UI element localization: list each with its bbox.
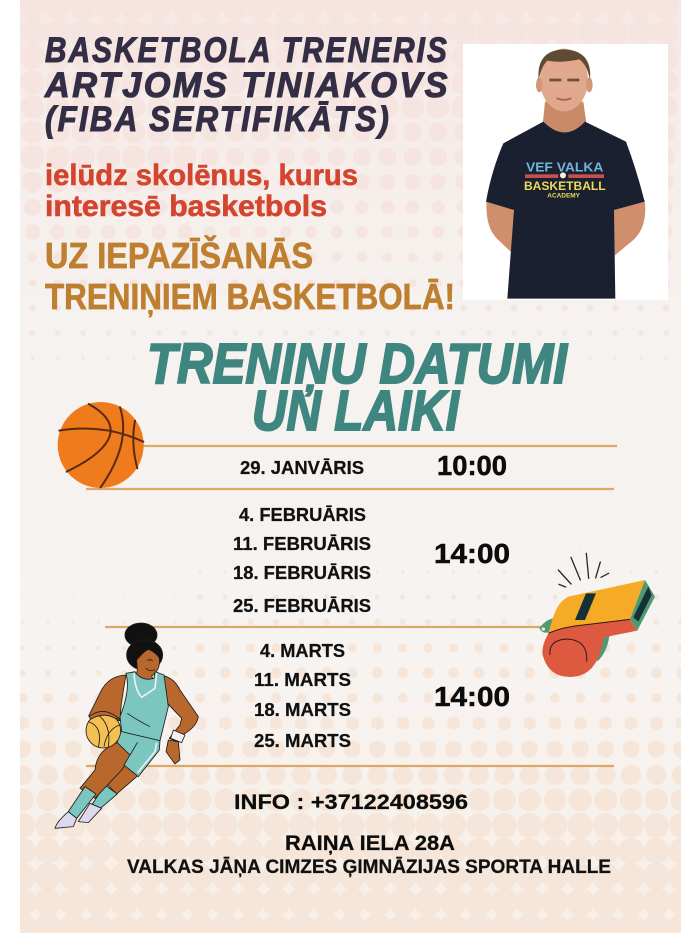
January row: 29. JANVĀRIS bbox=[240, 458, 364, 478]
March row: 14:00 bbox=[434, 681, 510, 712]
icon: whistle bbox=[520, 553, 655, 677]
t-shirt print: VEF VALKA bbox=[526, 159, 604, 174]
heading: coach name: ARTJOMS TINIAKOVS bbox=[44, 66, 450, 105]
heading: coach name: (FIBA SERTIFIKĀTS) bbox=[45, 100, 391, 139]
arms bbox=[89, 675, 126, 721]
neck and head bbox=[543, 102, 587, 132]
back leg bbox=[107, 765, 139, 794]
subheading: intro trainings bbox=[45, 234, 455, 317]
invitation text bbox=[45, 159, 358, 223]
heading: coach name: BASKETBOLA TRENERIS bbox=[45, 31, 449, 70]
March row: 4. MARTS bbox=[260, 641, 345, 661]
shoes bbox=[78, 803, 102, 823]
February row bbox=[233, 505, 510, 616]
jersey bbox=[120, 672, 168, 741]
invitation text: ielūdz skolēnus, kurus bbox=[45, 159, 358, 192]
illustration: basketball player bbox=[55, 623, 198, 828]
heading: training dates and times: TRENIŅU DATUMI bbox=[147, 332, 568, 396]
arms bbox=[486, 200, 645, 257]
shorts bbox=[117, 731, 160, 777]
address bbox=[127, 832, 611, 878]
icon: basketball bbox=[58, 402, 144, 488]
t-shirt bbox=[486, 122, 645, 299]
coach photo bbox=[463, 44, 668, 300]
January row: 10:00 bbox=[437, 450, 507, 481]
heading: training dates and times: UN LAIKI bbox=[252, 379, 460, 443]
address: RAIŅA IELA 28A bbox=[285, 832, 455, 855]
March row: 11. MARTS bbox=[254, 670, 351, 690]
invitation text: interesē basketbols bbox=[45, 190, 327, 223]
heading: training dates and times bbox=[147, 332, 568, 443]
March row: 18. MARTS bbox=[254, 700, 351, 720]
February row: 4. FEBRUĀRIS bbox=[239, 505, 366, 525]
February row: 11. FEBRUĀRIS bbox=[233, 534, 371, 554]
February row: 18. FEBRUĀRIS bbox=[233, 563, 371, 583]
subheading: intro trainings: TRENIŅIEM BASKETBOLĀ! bbox=[45, 276, 455, 317]
hair bun bbox=[125, 623, 157, 647]
March row bbox=[254, 641, 510, 751]
coach photo: ACADEMY bbox=[547, 193, 581, 200]
ball bbox=[86, 713, 121, 748]
schedule divider lines bbox=[86, 446, 617, 766]
front leg bbox=[80, 743, 135, 798]
heading: coach name bbox=[44, 31, 450, 139]
March row: 25. MARTS bbox=[254, 731, 351, 751]
February row: 25. FEBRUĀRIS bbox=[233, 596, 371, 616]
face and neck bbox=[135, 649, 159, 682]
January row bbox=[240, 450, 507, 481]
hand on ball bbox=[89, 711, 120, 719]
coach photo: BASKETBALL bbox=[524, 179, 606, 193]
February row: 14:00 bbox=[434, 538, 510, 569]
contact info: INFO : +37122408596 bbox=[234, 791, 468, 814]
subheading: intro trainings: UZ IEPAZĪŠANĀS bbox=[45, 234, 313, 276]
address: VALKAS JĀŅA CIMZES ĢIMNĀZIJAS SPORTA HALLE bbox=[127, 856, 611, 878]
